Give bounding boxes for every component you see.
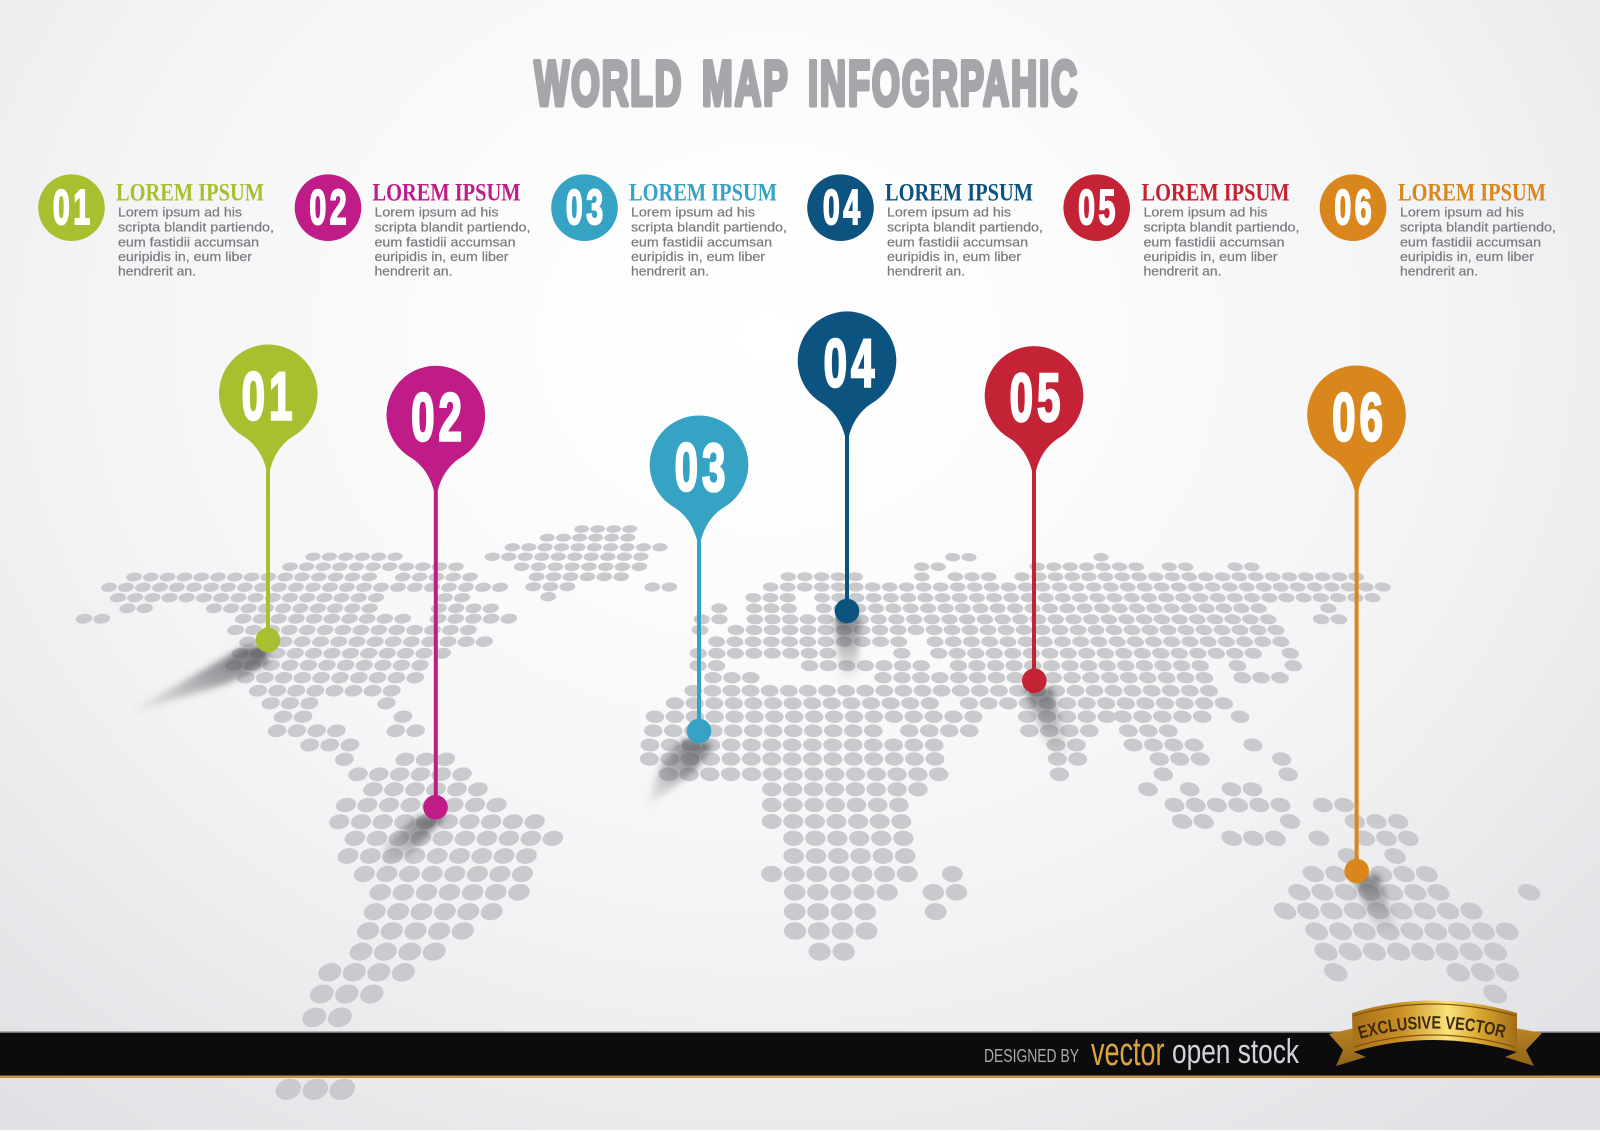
legend item 04	[807, 174, 1043, 278]
legend item 02: 02	[309, 180, 347, 235]
legend item 01: hendrerit an.	[118, 264, 196, 278]
legend item 01: scripta blandit partiendo,	[118, 220, 274, 234]
footer credit: open stock	[1172, 1033, 1300, 1071]
legend item 03: 03	[566, 180, 603, 235]
pin 06	[1307, 366, 1406, 883]
legend item 06: hendrerit an.	[1400, 264, 1478, 278]
legend item 05	[1063, 174, 1300, 278]
map: east Asia and Australia	[1097, 567, 1529, 994]
legend item 06: eum fastidii accumsan	[1400, 236, 1541, 250]
title: MAP	[702, 48, 790, 119]
legend item 04: LOREM IPSUM	[885, 180, 1033, 207]
footer bar	[0, 1032, 1600, 1078]
legend item 06: 06	[1334, 180, 1372, 235]
map: Greenland and Iceland	[492, 529, 669, 597]
pin 05: 05	[1010, 360, 1060, 435]
shadow of pin 03	[646, 738, 712, 808]
legend item 03: euripidis in, eum liber	[631, 250, 765, 264]
pin 06: 06	[1332, 379, 1383, 455]
legend item 03: scripta blandit partiendo,	[631, 220, 787, 234]
pin 04: 04	[824, 325, 875, 401]
shadow of pin 04	[834, 618, 860, 682]
legend item 04: 04	[823, 180, 860, 235]
title	[534, 48, 1079, 119]
map: North America	[84, 557, 509, 759]
legend item 03: Lorem ipsum ad his	[631, 206, 755, 220]
legend item 01: LOREM IPSUM	[116, 180, 264, 207]
legend item 01: eum fastidii accumsan	[118, 236, 259, 250]
legend item 05: scripta blandit partiendo,	[1144, 220, 1300, 234]
pin 01	[219, 345, 318, 652]
legend item 04: euripidis in, eum liber	[887, 250, 1021, 264]
pin 05	[985, 346, 1083, 693]
legend item 05: hendrerit an.	[1144, 264, 1222, 278]
pin 01: 01	[242, 358, 292, 434]
legend item 06: euripidis in, eum liber	[1400, 250, 1534, 264]
legend item 01: 01	[53, 180, 90, 235]
legend item 05: eum fastidii accumsan	[1144, 236, 1285, 250]
legend item 03: eum fastidii accumsan	[631, 236, 772, 250]
legend item 01: Lorem ipsum ad his	[118, 206, 242, 220]
legend item 03	[551, 174, 787, 278]
legend item 02	[295, 174, 530, 278]
pin 03	[650, 416, 748, 743]
footer credit	[984, 1030, 1300, 1074]
gold ribbon badge: EXCLUSIVE VECTOR	[1358, 1016, 1506, 1039]
legend item 02: euripidis in, eum liber	[374, 250, 508, 264]
legend item 02: scripta blandit partiendo,	[374, 220, 530, 234]
legend item 05: LOREM IPSUM	[1142, 180, 1290, 207]
legend item 05: Lorem ipsum ad his	[1144, 206, 1268, 220]
legend item 04: scripta blandit partiendo,	[887, 220, 1043, 234]
title: WORLD	[534, 48, 683, 119]
pin 02: 02	[411, 379, 462, 455]
shadow of pin 06	[1353, 874, 1400, 936]
legend item 04: eum fastidii accumsan	[887, 236, 1028, 250]
pin 02	[386, 366, 485, 820]
legend item 05: euripidis in, eum liber	[1144, 250, 1278, 264]
footer credit: DESIGNED BY	[984, 1046, 1079, 1066]
legend item 02: LOREM IPSUM	[372, 180, 520, 207]
legend item 03: LOREM IPSUM	[629, 180, 777, 207]
dotted world map	[84, 529, 1529, 1089]
shadow of pin 05	[1024, 688, 1070, 757]
legend item 06: Lorem ipsum ad his	[1400, 206, 1524, 220]
legend item 03: hendrerit an.	[631, 264, 709, 278]
legend item 06: scripta blandit partiendo,	[1400, 220, 1556, 234]
pin 03: 03	[675, 429, 725, 505]
legend item 05: 05	[1078, 180, 1115, 235]
title: INFOGRPAHIC	[808, 49, 1079, 119]
legend item 06	[1320, 174, 1556, 278]
legend item 02: hendrerit an.	[374, 264, 452, 278]
legend item 04: Lorem ipsum ad his	[887, 206, 1011, 220]
legend item 02: Lorem ipsum ad his	[374, 206, 498, 220]
footer credit: vector	[1091, 1030, 1164, 1074]
pin 04	[798, 311, 896, 623]
gold ribbon badge	[1329, 1000, 1542, 1066]
map: South America	[288, 759, 553, 1089]
shadow of pin 02	[382, 816, 446, 870]
legend item 04: hendrerit an.	[887, 264, 965, 278]
legend item 01: euripidis in, eum liber	[118, 250, 252, 264]
legend row	[38, 174, 1556, 278]
legend item 06: LOREM IPSUM	[1398, 180, 1546, 207]
legend item 02: eum fastidii accumsan	[374, 236, 516, 250]
map: Europe, Africa and west Asia	[649, 557, 1107, 952]
legend item 01	[38, 174, 274, 278]
shadow of pin 01	[127, 645, 268, 714]
